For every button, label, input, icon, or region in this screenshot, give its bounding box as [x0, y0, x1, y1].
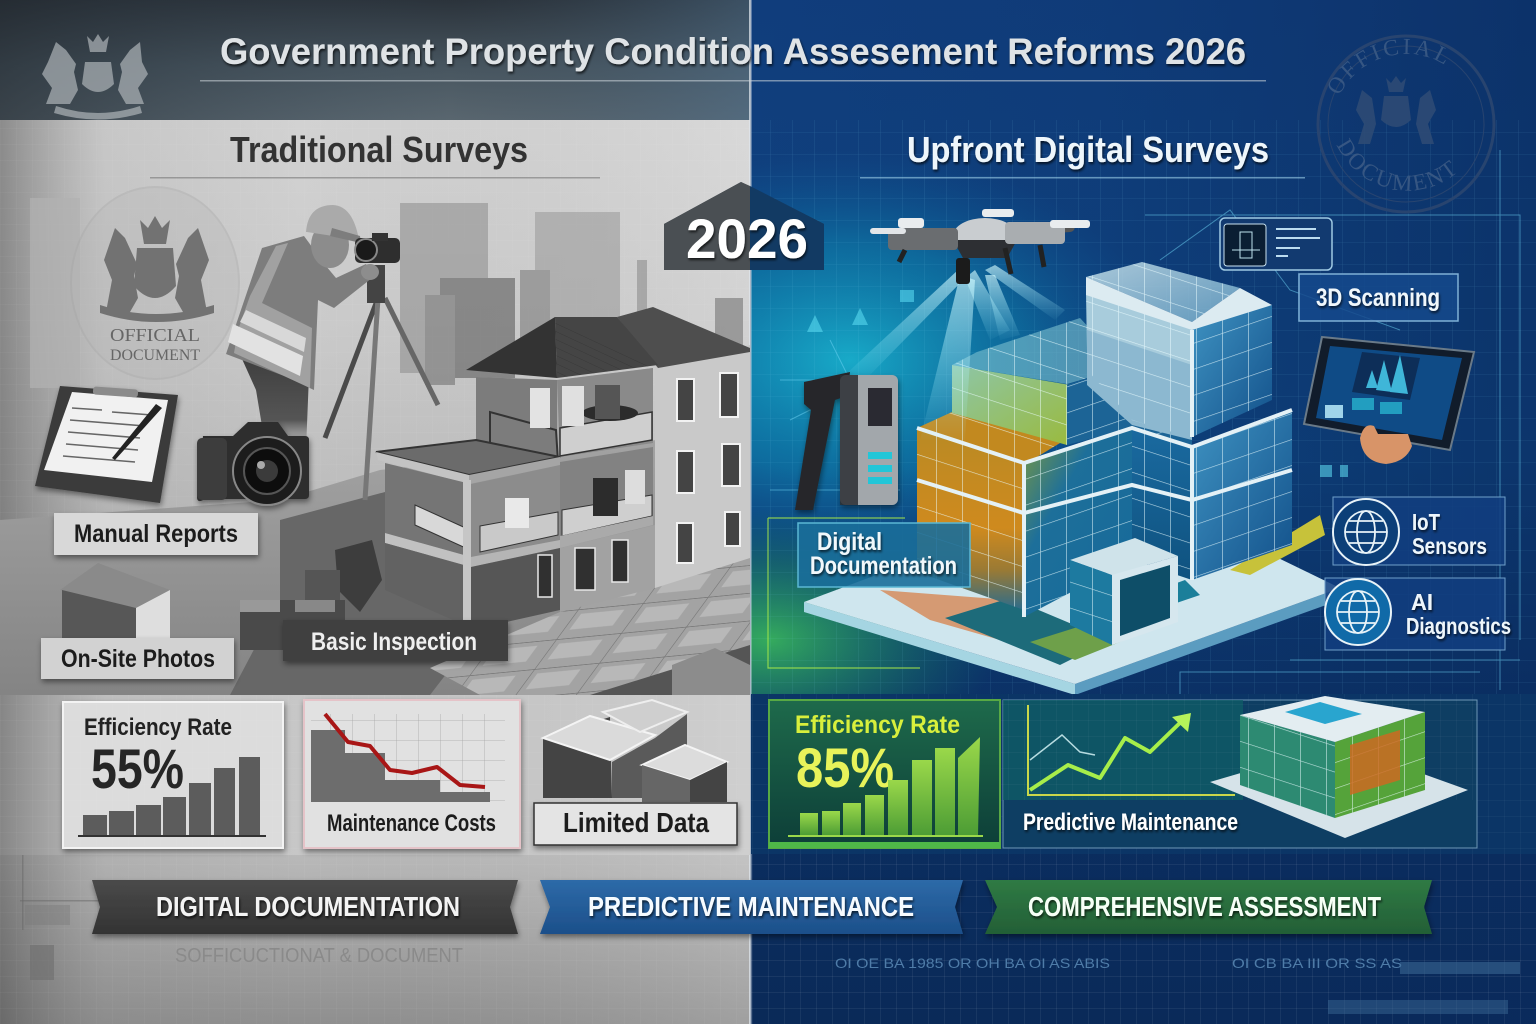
illustration: glass digital twin building	[804, 262, 1340, 695]
badge: 2026: 2026	[686, 207, 808, 270]
panel: digital side background	[751, 0, 1536, 1024]
faint watermark text: OI CB BA III OR SS AS	[1232, 955, 1402, 971]
label: digital documentation: Digital	[817, 528, 882, 556]
illustration: surveyor with tripod	[226, 205, 438, 500]
icon: document box	[60, 563, 170, 640]
bar chart: efficiency 55	[78, 757, 266, 837]
header band	[0, 0, 752, 1024]
label: on-site photos	[41, 638, 234, 679]
badge: 2026	[664, 182, 824, 270]
card: scan plan screen	[1220, 218, 1332, 270]
panel: maintenance costs: Maintenance Costs	[327, 810, 496, 837]
faint watermark text: OI OE BA 1985 OR OH BA OI AS ABIS	[835, 955, 1110, 971]
panel: predictive maintenance: Predictive Maintenance	[1023, 809, 1238, 836]
panel: efficiency rate 85%: Efficiency Rate	[795, 711, 960, 739]
label: basic inspection: Basic Inspection	[311, 628, 477, 656]
panel strip: traditional metrics background	[0, 695, 750, 855]
label: IoT sensors with globe	[1333, 497, 1505, 565]
boxes: site clutter	[240, 540, 382, 650]
ground: street and paving	[0, 430, 750, 695]
stamp: official document: DOCUMENT	[1336, 138, 1456, 191]
label: digital documentation: Documentation	[810, 552, 957, 580]
panel: efficiency rate 85%	[769, 700, 1000, 848]
label: AI diagnostics with globe	[1325, 578, 1511, 650]
seal: official document: DOCUMENT	[110, 347, 200, 364]
icon: royal crest header	[42, 34, 148, 120]
icon: tablet held in hand	[1304, 337, 1474, 464]
title: Government Property Condition Assesement Reforms 2026	[220, 31, 1246, 72]
icon: camera	[197, 422, 309, 505]
panel strip: digital metrics background	[751, 694, 1536, 1024]
seal: official document	[71, 187, 239, 379]
icon: clipboard with pen	[35, 386, 178, 503]
panel: predictive maintenance	[1003, 700, 1477, 848]
panel: limited data	[534, 700, 737, 845]
label: IoT sensors with globe: Sensors	[1412, 533, 1487, 559]
label: manual reports	[54, 513, 258, 555]
label: basic inspection	[283, 620, 508, 661]
label: 3D scanning	[1299, 274, 1458, 321]
seal: official document: OFFICIAL	[110, 325, 200, 345]
tower glass faces	[917, 428, 1024, 610]
stamp: official document	[1316, 34, 1496, 214]
label: manual reports: Manual Reports	[74, 520, 238, 548]
panel: efficiency rate 85%: 85%	[796, 736, 894, 799]
label: 3D scanning: 3D Scanning	[1316, 284, 1440, 312]
banner: comprehensive assessment: COMPREHENSIVE ASSESSMENT	[1028, 891, 1381, 922]
city skyline	[30, 198, 743, 388]
stamp: official document: OFFICIAL	[1328, 38, 1446, 93]
heading: traditional surveys: Traditional Surveys	[230, 129, 528, 170]
scan beams from drone	[845, 265, 1065, 440]
banner: predictive maintenance	[540, 880, 963, 934]
faint watermark text: SOFFICUCTIONAT & DOCUMENT	[175, 945, 463, 967]
line chart: rising prediction	[1030, 713, 1191, 790]
line chart: falling costs	[325, 714, 485, 787]
panel: efficiency rate 55%: 55%	[91, 737, 184, 800]
platform	[804, 515, 1340, 695]
label: AI diagnostics with globe: AI	[1411, 589, 1433, 615]
label: on-site photos: On-Site Photos	[61, 645, 215, 673]
panel: traditional side background	[0, 120, 750, 1024]
panel: limited data: Limited Data	[563, 807, 709, 838]
panel: efficiency rate 55%	[63, 702, 283, 848]
banner: comprehensive assessment	[985, 880, 1432, 934]
icon: survey drone	[870, 209, 1090, 284]
illustration: inspected house cutaway	[376, 307, 750, 630]
label: IoT sensors with globe: IoT	[1412, 509, 1440, 535]
banner: digital documentation	[92, 880, 518, 934]
heading: upfront digital surveys: Upfront Digital Surveys	[907, 129, 1269, 170]
panel: maintenance costs	[304, 700, 520, 848]
label: AI diagnostics with globe: Diagnostics	[1406, 613, 1511, 639]
faint watermark text	[175, 945, 1520, 1014]
bar chart: efficiency 85	[800, 737, 980, 835]
icon: handheld 3D scanner	[795, 372, 898, 510]
entrance	[1070, 538, 1178, 645]
icon: mini colour-coded building	[1210, 696, 1468, 838]
banner: digital documentation: DIGITAL DOCUMENTATION	[156, 891, 460, 922]
banner: predictive maintenance: PREDICTIVE MAINTENANCE	[588, 891, 914, 922]
label: digital documentation	[768, 518, 970, 668]
panel: efficiency rate 55%: Efficiency Rate	[84, 714, 232, 741]
